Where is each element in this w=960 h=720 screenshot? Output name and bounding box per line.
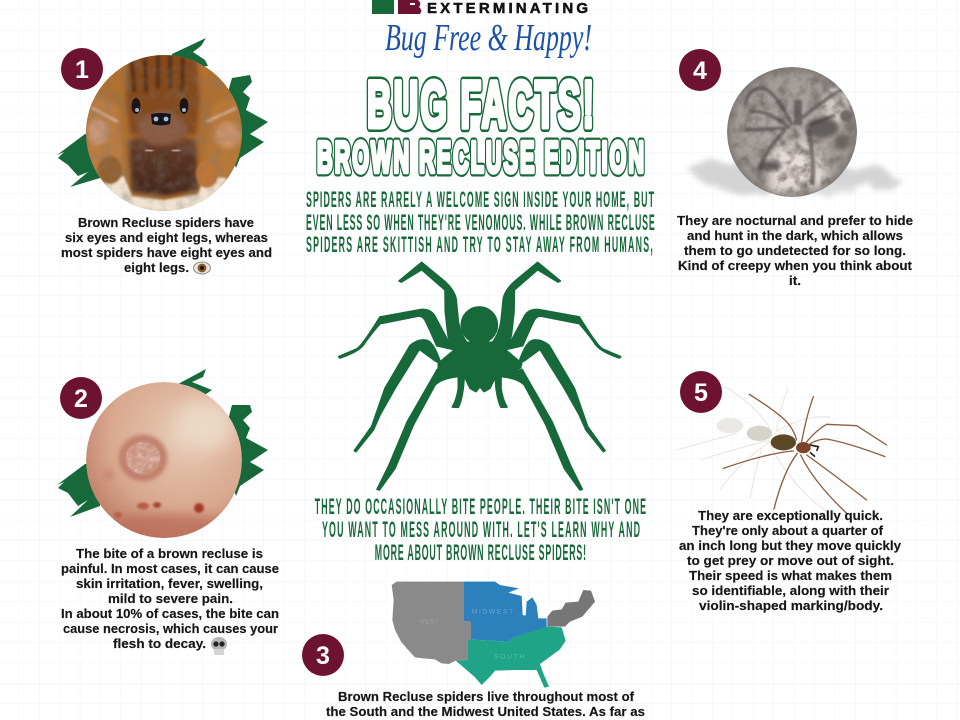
badge 5: 5 <box>694 379 708 407</box>
text: fact 1: most spiders have eight eyes and <box>61 246 272 260</box>
spider silhouette <box>339 262 621 490</box>
badge 4 <box>679 49 721 91</box>
text: fact 4 <box>677 214 913 288</box>
badge 1 <box>61 48 103 90</box>
panel: fact 3 range map <box>302 582 645 719</box>
text: fact 1: six eyes and eight legs, whereas <box>65 231 268 245</box>
panel: fact 2 bite <box>57 369 279 655</box>
title: Bug Facts! Brown Recluse Edition <box>317 67 646 182</box>
text: fact 4: them to go undetected for so long. <box>684 244 906 258</box>
text: fact 4: Kind of creepy when you think about <box>678 259 913 273</box>
text: fact 2: painful. In most cases, it can cause <box>61 562 279 576</box>
badge 5 <box>680 371 722 413</box>
badge 4: 4 <box>693 57 707 85</box>
text: fact 3: the South and the Midwest United States. As far as <box>326 705 645 719</box>
text: fact 5: violin-shaped marking/body. <box>699 599 883 613</box>
text: fact 5: They are exceptionally quick. <box>698 509 883 523</box>
text: fact 2: cause necrosis, which causes your <box>63 622 278 636</box>
cloud <box>688 161 903 194</box>
intro text: SPIDERS ARE SKITTISH AND TRY TO STAY AWAY FROM HUMANS, <box>306 232 653 257</box>
badge 2 <box>60 377 102 419</box>
photo: skin lesion <box>86 382 242 546</box>
text: fact 4: it. <box>789 274 801 288</box>
photo: running spider with motion ghost <box>677 387 887 513</box>
text: fact 1 <box>61 216 272 275</box>
map: WEST <box>419 619 439 625</box>
brush stroke 2 <box>57 369 268 517</box>
text: fact 2 <box>61 547 279 651</box>
icon: skull <box>211 637 227 655</box>
logo: Exterminating wordmark: EXTERMINATING <box>427 0 588 17</box>
text: fact 5 <box>679 509 901 613</box>
text: fact 1: Brown Recluse spiders have <box>78 216 254 230</box>
text: fact 3 <box>326 690 645 719</box>
brush stroke 1 <box>57 38 268 187</box>
badge 3 <box>302 634 344 676</box>
text: fact 4: and hunt in the dark, which allows <box>687 229 903 243</box>
text: fact 3: Brown Recluse spiders live throughout most of <box>338 690 635 704</box>
continuation text: THEY DO OCCASIONALLY BITE PEOPLE. THEIR BITE ISN'T ONE <box>315 494 646 519</box>
text: fact 2: mild to severe pain. <box>108 592 233 606</box>
icon: eye <box>194 262 210 274</box>
text: fact 2: In about 10% of cases, the bite can <box>61 607 279 621</box>
text: fact 5: Their speed is what makes them <box>689 569 892 583</box>
intro text <box>306 187 655 257</box>
panel: fact 4 nocturnal <box>677 49 913 288</box>
continuation text: YOU WANT TO MESS AROUND WITH. LET'S LEARN WHY AND <box>322 517 640 542</box>
text: fact 4: They are nocturnal and prefer to hide <box>677 214 913 228</box>
tagline: Bug Free and Happy: Bug Free & Happy! <box>385 17 592 59</box>
moon with spider shadow <box>727 67 857 197</box>
map: MIDWEST <box>472 608 515 615</box>
text: fact 2: skin irritation, fever, swelling, <box>76 577 263 591</box>
badge 2: 2 <box>74 385 88 413</box>
text: fact 5: to get prey or move out of sight. <box>687 554 894 568</box>
text: fact 2: flesh to decay. <box>113 637 206 651</box>
title: Bug Facts! Brown Recluse Edition: BUG FACTS! <box>367 67 596 141</box>
continuation text <box>315 494 646 565</box>
map <box>392 582 595 688</box>
panel: fact 5 speed <box>677 371 901 613</box>
text: fact 5: They're only about a quarter of <box>692 524 884 538</box>
map: SOUTH <box>494 654 526 661</box>
title: Bug Facts! Brown Recluse Edition: BUG FACTS! <box>367 67 596 141</box>
intro text: EVEN LESS SO WHEN THEY'RE VENOMOUS. WHILE BROWN RECLUSE <box>306 210 655 235</box>
text: fact 1: eight legs. <box>124 261 189 275</box>
badge 1: 1 <box>75 56 89 84</box>
photo: spider face <box>86 52 242 215</box>
intro text: SPIDERS ARE RARELY A WELCOME SIGN INSIDE YOUR HOME, BUT <box>306 187 654 212</box>
text: fact 5: so identifiable, along with their <box>692 584 889 598</box>
panel: fact 1 eyes and legs <box>57 38 272 275</box>
text: fact 5: an inch long but they move quickly <box>679 539 901 553</box>
text: fact 2: The bite of a brown recluse is <box>76 547 263 561</box>
badge 3: 3 <box>316 642 330 670</box>
continuation text: MORE ABOUT BROWN RECLUSE SPIDERS! <box>375 540 586 565</box>
